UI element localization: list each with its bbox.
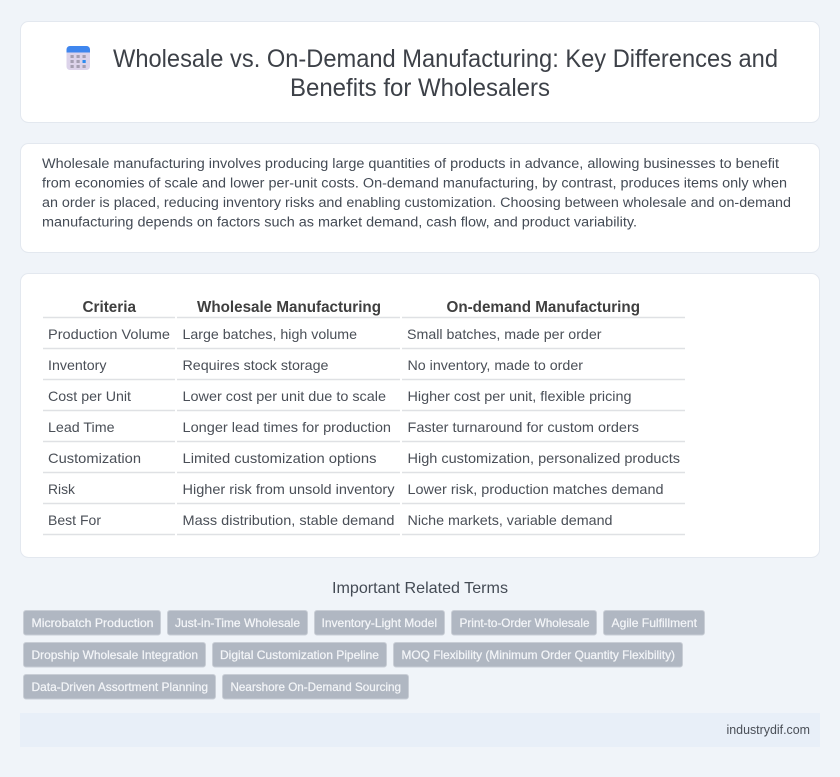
tag: agile fulfillment (604, 610, 704, 635)
tag: inventory-light model: Inventory-Light Model (322, 616, 437, 630)
tag: print-to-order wholesale (452, 610, 596, 635)
title (113, 45, 778, 102)
icon: calendar grid (66, 46, 90, 70)
table row: inventory (48, 357, 583, 373)
table row: production volume: Production Volume (48, 326, 170, 342)
table row: risk: Risk (48, 481, 76, 497)
table row: production volume (48, 326, 602, 342)
table header row: On-demand Manufacturing (446, 299, 640, 316)
tag: digital customization pipeline: Digital Customization Pipeline (220, 648, 379, 662)
table row: best for (48, 512, 612, 528)
tag: microbatch production (24, 610, 160, 635)
tag: just-in-time wholesale: Just-in-Time Wholesale (175, 616, 300, 630)
tag: dropship wholesale integration (24, 642, 206, 667)
table row: lead time: Faster turnaround for custom orders (408, 419, 639, 435)
table row: customization: Limited customization options (182, 450, 376, 466)
table header row (82, 299, 640, 316)
tag: data-driven assortment planning: Data-Driven Assortment Planning (32, 680, 208, 694)
heading: important related terms: Important Related Terms (332, 580, 508, 597)
table row: production volume: Large batches, high volume (182, 326, 357, 342)
table row: best for: Niche markets, variable demand (408, 512, 612, 528)
tag: print-to-order wholesale: Print-to-Order Wholesale (460, 616, 590, 630)
tag: MOQ flexibility: MOQ Flexibility (Minimum Order Quantity Flexibility) (402, 648, 675, 662)
tag: agile fulfillment: Agile Fulfillment (612, 616, 698, 630)
table row: inventory: Inventory (48, 357, 106, 373)
table row: cost per unit: Cost per Unit (48, 388, 131, 404)
tag: data-driven assortment planning (24, 674, 216, 699)
table row: cost per unit: Lower cost per unit due to scale (182, 388, 386, 404)
panel: comparison table (20, 274, 820, 558)
table row: inventory: Requires stock storage (182, 357, 329, 373)
title: Wholesale vs. On-Demand Manufacturing: Key Differences and (113, 45, 778, 73)
table row: lead time: Lead Time (48, 419, 115, 435)
text block: introduction: from economies of scale and lower per-unit costs. On-demand manufacturing, by contrast, produces items only when (42, 176, 787, 192)
table row: risk (48, 481, 664, 497)
table row: customization (48, 450, 680, 466)
table row: risk: Higher risk from unsold inventory (182, 481, 394, 497)
tag: nearshore on-demand sourcing (222, 674, 408, 699)
tag: inventory-light model (314, 610, 444, 635)
table row: customization: Customization (48, 450, 141, 466)
tag: dropship wholesale integration: Dropship Wholesale Integration (32, 648, 198, 662)
table row: risk: Lower risk, production matches demand (408, 481, 664, 497)
table row: best for: Best For (48, 512, 101, 528)
text block: introduction: an order is placed, reducing inventory risks and enabling customization. Choosing between wholesale and on-demand (42, 195, 791, 211)
tag: MOQ flexibility (394, 642, 682, 667)
panel: title header (20, 22, 820, 122)
tag: digital customization pipeline (212, 642, 386, 667)
tag: just-in-time wholesale (168, 610, 308, 635)
text block: introduction (42, 156, 791, 230)
text block: introduction: Wholesale manufacturing involves producing large quantities of products in advance, allowing businesses to benefit (42, 156, 779, 172)
footer source text: industrydif.com (726, 723, 810, 737)
table header row: Criteria (82, 299, 136, 316)
panel: introduction paragraph (20, 144, 820, 252)
table row: production volume: Small batches, made per order (407, 326, 602, 342)
title: Benefits for Wholesalers (290, 74, 550, 102)
table row: cost per unit (48, 388, 632, 404)
tag: microbatch production: Microbatch Production (32, 616, 154, 630)
text block: introduction: manufacturing depends on factors such as market demand, cash flow, and product variability. (42, 214, 637, 230)
table header row: Wholesale Manufacturing (197, 299, 381, 316)
related term tags (24, 610, 704, 699)
table row: best for: Mass distribution, stable demand (182, 512, 394, 528)
table row: cost per unit: Higher cost per unit, flexible pricing (408, 388, 632, 404)
footer bar (20, 713, 820, 747)
tag: nearshore on-demand sourcing: Nearshore On-Demand Sourcing (230, 680, 401, 694)
table row: customization: High customization, personalized products (408, 450, 680, 466)
table row: inventory: No inventory, made to order (408, 357, 583, 373)
table row: lead time: Longer lead times for production (182, 419, 391, 435)
table row: lead time (48, 419, 639, 435)
